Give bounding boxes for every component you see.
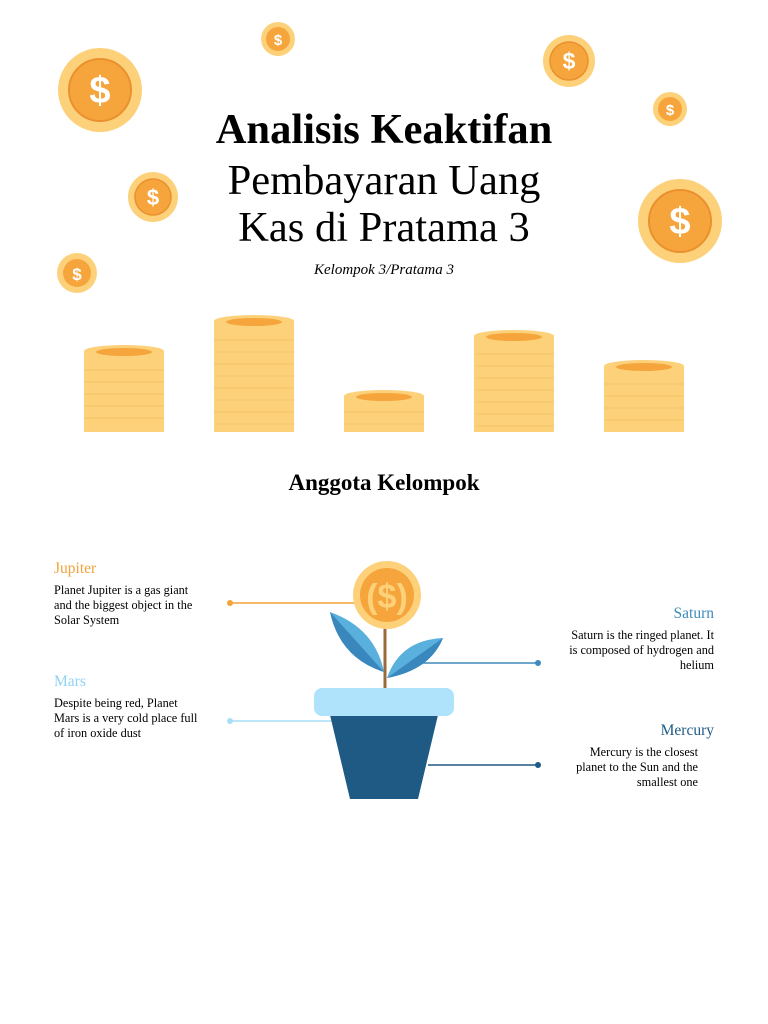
item: Mars <box>54 673 198 740</box>
icon: coin mid left <box>128 172 178 222</box>
plant illustration <box>227 561 541 799</box>
heading: anggota: Anggota Kelompok <box>288 470 480 495</box>
item: Mercury: smallest one <box>637 775 698 789</box>
item: Jupiter <box>54 560 192 627</box>
icon: coin large left: $ <box>89 70 111 112</box>
item: Mars: Mars is a very cold place full <box>54 711 197 725</box>
item: Mercury: Mercury <box>661 722 714 739</box>
icon: coin small right <box>653 92 687 126</box>
item: Saturn: is composed of hydrogen and <box>569 643 714 657</box>
item: Mars: of iron oxide dust <box>54 726 141 740</box>
icon: coin large left <box>58 48 142 132</box>
item: Mercury: planet to the Sun and the <box>576 760 698 774</box>
item: Saturn: helium <box>680 658 714 672</box>
icon: coin top right <box>543 35 595 87</box>
byline: Kelompok 3/Pratama 3 <box>314 262 454 278</box>
icon: coin left lower <box>57 253 97 293</box>
item: Jupiter: Planet Jupiter is a gas giant <box>54 583 188 597</box>
coin stacks <box>84 315 684 432</box>
connector lines <box>227 600 541 768</box>
icon: coin large right <box>638 179 722 263</box>
icon: coin small top <box>261 22 295 56</box>
item: Saturn: Saturn is the ringed planet. It <box>571 628 714 642</box>
item: Jupiter: and the biggest object in the <box>54 598 192 612</box>
icon: coin small top: $ <box>274 32 283 49</box>
icon: coin left lower: $ <box>72 265 82 284</box>
item: Jupiter: Solar System <box>54 613 119 627</box>
item: Saturn <box>569 605 714 672</box>
item: Mars: Mars <box>54 673 86 690</box>
icon: coin mid left: $ <box>147 185 159 210</box>
subtitle: Kas di Pratama 3 <box>238 204 530 251</box>
icon: coin small right: $ <box>666 102 675 119</box>
item: Jupiter: Jupiter <box>54 560 96 577</box>
subtitle: Pembayaran Uang <box>228 157 540 204</box>
item: Mars: Despite being red, Planet <box>54 696 178 710</box>
title: Analisis Keaktifan <box>216 106 552 153</box>
item: Mercury: Mercury is the closest <box>590 745 698 759</box>
icon: coin top right: $ <box>563 48 576 74</box>
item: Mercury <box>576 722 714 789</box>
icon: coin large right: $ <box>669 201 691 243</box>
item: Saturn: Saturn <box>674 605 714 622</box>
subtitle <box>228 157 540 251</box>
plant illustration: ($) <box>366 578 408 616</box>
